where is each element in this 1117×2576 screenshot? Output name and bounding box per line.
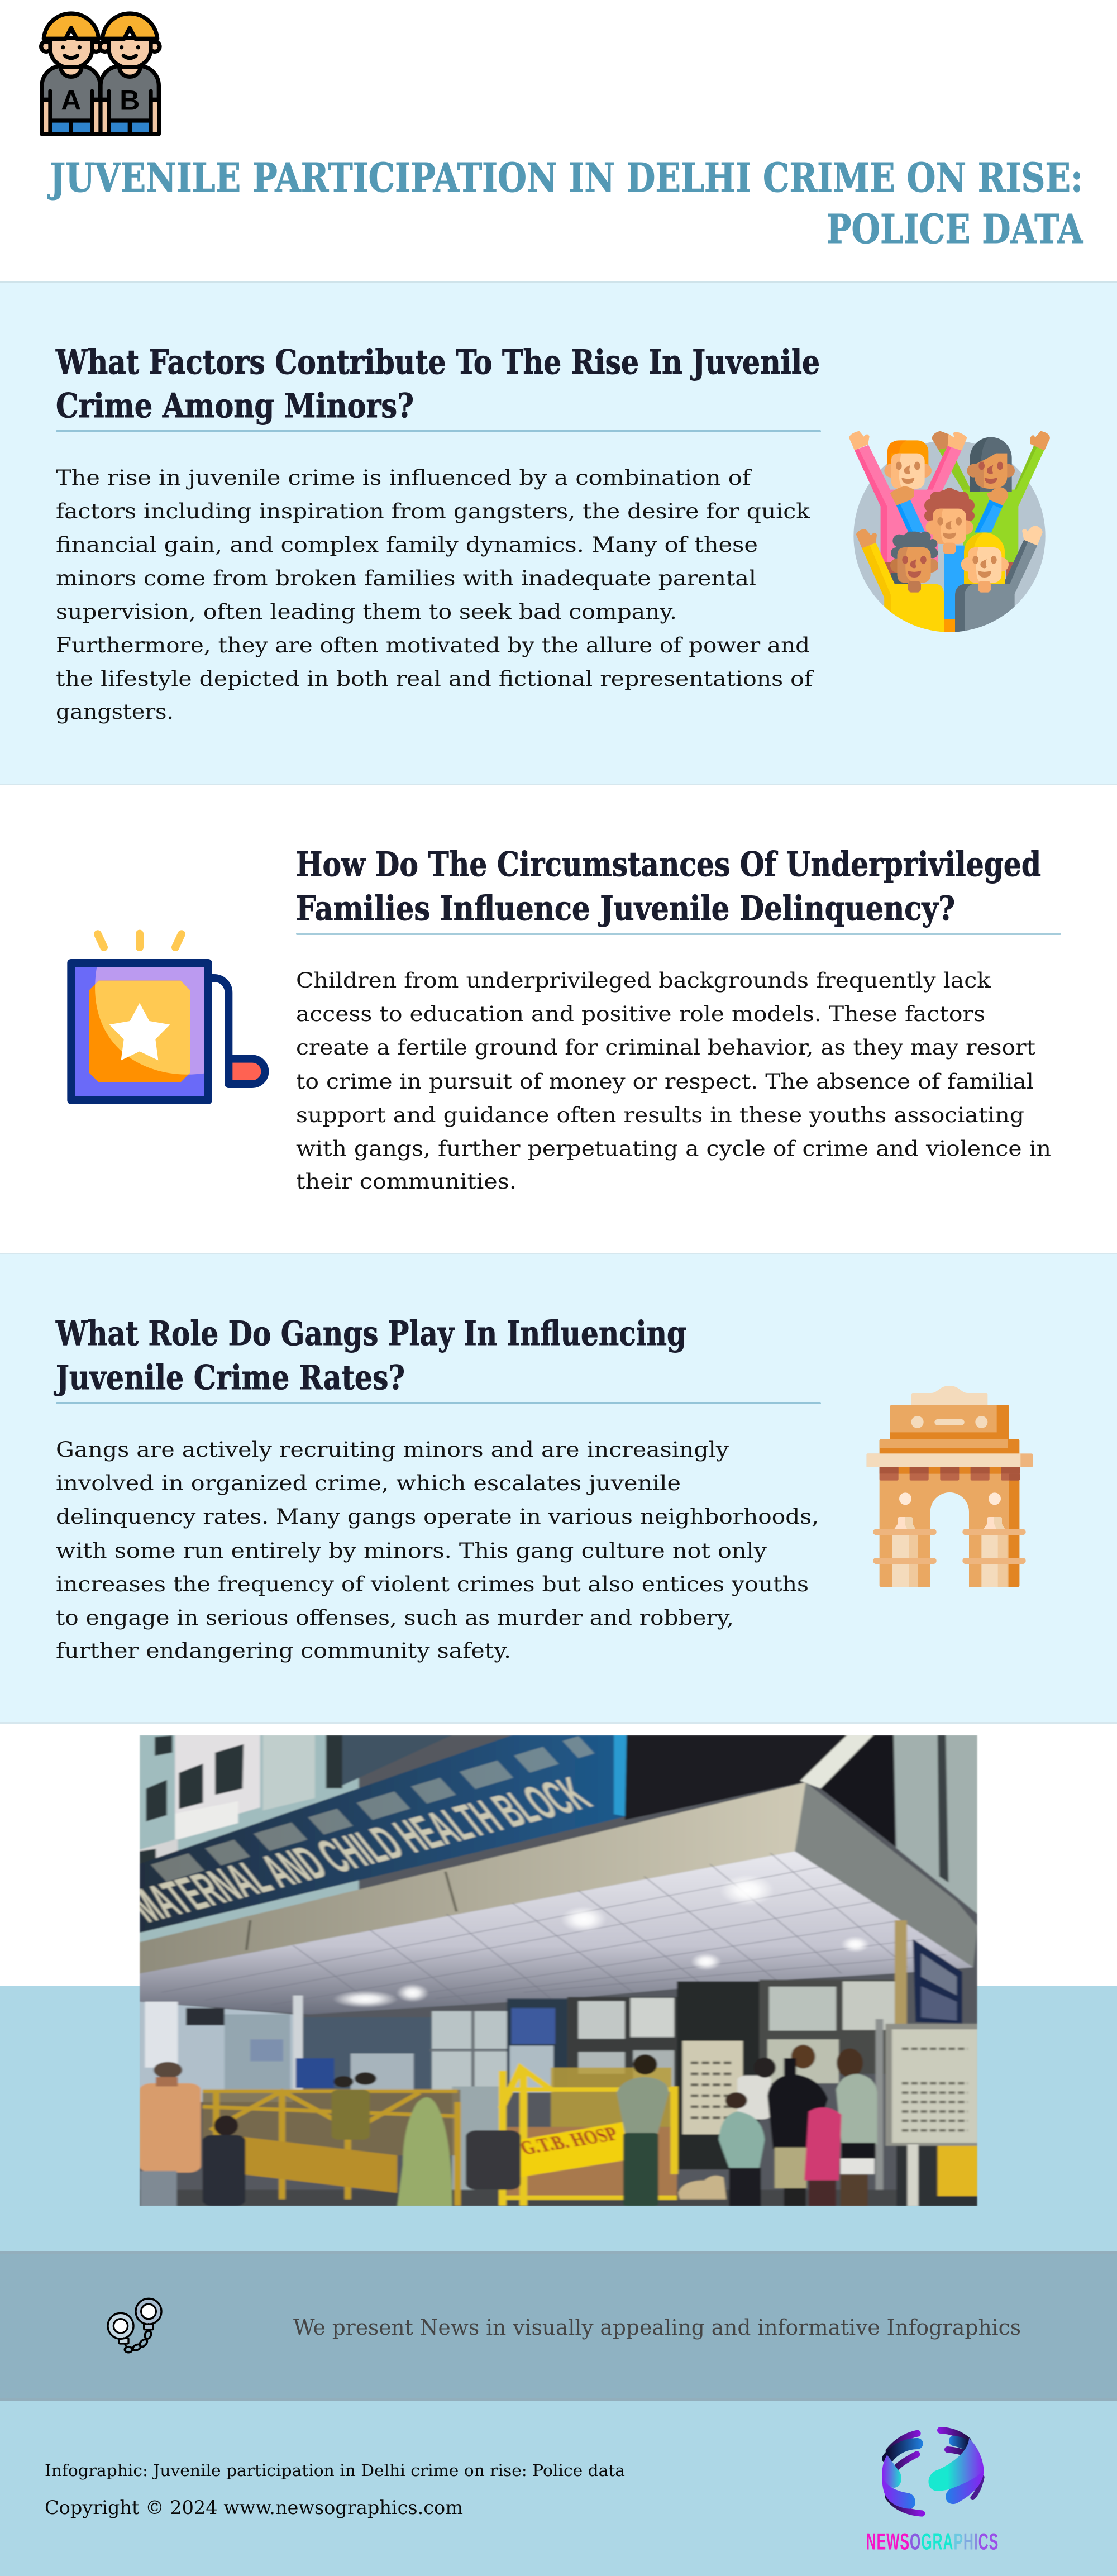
body text: Furthermore, they are often motivated by the allure of power and xyxy=(56,633,810,657)
man in patterned shirt xyxy=(633,2054,657,2074)
notice boards xyxy=(682,2041,743,2134)
icon: twin boys A and B: A xyxy=(61,85,81,116)
ceiling xyxy=(140,1851,973,2014)
body text xyxy=(56,466,814,724)
body text: to crime in pursuit of money or respect. The absence of familial xyxy=(296,1070,1034,1094)
tagline: We present News in visually appealing and informative Infographics xyxy=(293,2315,1021,2340)
left barricade xyxy=(203,2090,460,2155)
body text: financial gain, and complex family dynamics. Many of these xyxy=(56,533,758,557)
body text: The rise in juvenile crime is influenced by a combination of xyxy=(56,466,752,490)
body text: support and guidance often results in these youths associating xyxy=(296,1103,1024,1127)
icon: twin boys A and B: B xyxy=(120,85,140,116)
body text: Children from underprivileged backgrounds frequently lack xyxy=(296,969,991,993)
woman in green scarf xyxy=(397,2097,452,2206)
icon: India Gate xyxy=(867,1386,1033,1587)
body text: factors including inspiration from gangsters, the desire for quick xyxy=(56,499,810,523)
footer credits: Infographic: Juvenile participation in Delhi crime on rise: Police data xyxy=(45,2461,625,2480)
centre barricade xyxy=(551,2068,671,2127)
right lower yellow board xyxy=(896,2146,977,2206)
title xyxy=(47,154,1083,252)
heading: What Factors Contribute To The Rise In Juvenile xyxy=(55,343,820,382)
icon: music box with star xyxy=(67,929,269,1104)
gray person xyxy=(955,540,1037,633)
logo: Newsographics xyxy=(866,2430,998,2555)
blue sign xyxy=(140,1735,627,1933)
body text: delinquency rates. Many gangs operate in various neighborhoods, xyxy=(56,1505,819,1529)
icon: twin boys A and B xyxy=(39,11,162,136)
body text: their communities. xyxy=(296,1170,517,1194)
heading: Crime Among Minors? xyxy=(56,387,414,426)
header panel xyxy=(41,13,1083,252)
body text xyxy=(56,1438,819,1663)
heading: Juvenile Crime Rates? xyxy=(54,1358,405,1397)
body text: Gangs are actively recruiting minors and are increasingly xyxy=(56,1438,729,1462)
icon: cheering group of people xyxy=(849,431,1050,632)
body text: gangsters. xyxy=(56,700,174,724)
body text: create a fertile ground for criminal behavior, as they may resort xyxy=(296,1036,1035,1060)
heading xyxy=(54,1314,686,1397)
lights xyxy=(332,1875,870,2008)
green person xyxy=(938,448,970,492)
dog xyxy=(678,2176,727,2199)
yellow person xyxy=(891,573,908,584)
body text: increases the frequency of violent crimes but also entices youths xyxy=(56,1572,809,1596)
logo: Newsographics: NEWSOGRAPHICS xyxy=(866,2529,998,2555)
fascia xyxy=(140,1782,806,1973)
footer band xyxy=(0,2251,1117,2401)
top right dark facade xyxy=(625,1735,848,1820)
photo: hospital maternal and child health block entrance: G.T.B. HOSP xyxy=(516,2122,622,2159)
left people xyxy=(140,2083,201,2173)
photo: hospital maternal and child health block entrance xyxy=(140,1735,977,2206)
heading xyxy=(296,845,1041,928)
gray person hand xyxy=(1022,526,1043,546)
panel: underprivileged families xyxy=(67,850,1061,1189)
body text: with gangs, further perpetuating a cycle of crime and violence in xyxy=(296,1137,1051,1161)
body text: further endangering community safety. xyxy=(56,1639,511,1663)
yellow person hand xyxy=(856,529,877,548)
footer credits: Copyright © 2024 www.newsographics.com xyxy=(45,2497,463,2519)
upper building xyxy=(140,1735,359,1948)
body text: supervision, often leading them to seek bad company. xyxy=(56,600,677,624)
blue person xyxy=(944,619,955,632)
body text: the lifestyle depicted in both real and fictional representations of xyxy=(56,667,814,691)
body text: to engage in serious offenses, such as murder and robbery, xyxy=(56,1606,734,1630)
heading xyxy=(55,343,820,426)
panel: factors behind juvenile crime xyxy=(0,281,1117,785)
body text: involved in organized crime, which escalates juvenile xyxy=(56,1471,681,1495)
body text: access to education and positive role models. These factors xyxy=(296,1002,985,1026)
panel: role of gangs xyxy=(0,1253,1117,1724)
lower facade xyxy=(140,2002,293,2102)
right group xyxy=(737,2076,771,2119)
heading: Families Influence Juvenile Delinquency? xyxy=(296,889,955,928)
icon: handcuffs xyxy=(107,2298,163,2354)
heading: What Role Do Gangs Play In Influencing xyxy=(55,1314,686,1353)
lower background band xyxy=(0,1986,1117,2576)
floor xyxy=(140,2190,977,2206)
body text xyxy=(296,969,1051,1194)
body text: with some run entirely by minors. This gang culture not only xyxy=(56,1539,767,1563)
body text: minors come from broken families with inadequate parental xyxy=(56,566,756,590)
pink person xyxy=(855,445,962,570)
seated people xyxy=(466,2130,521,2190)
footer credits xyxy=(45,2461,625,2519)
